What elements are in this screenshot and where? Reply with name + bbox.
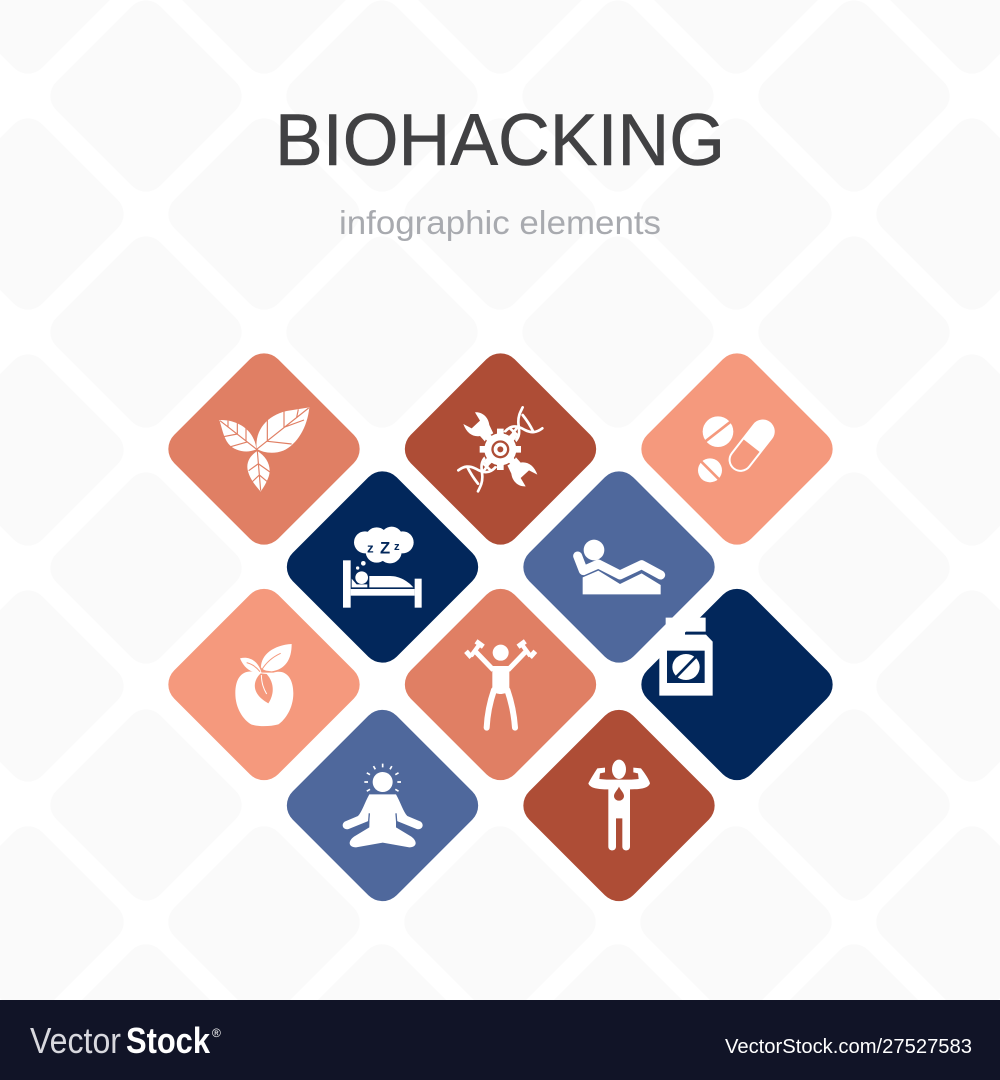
- panel: biotech DNA and wrench: [397, 345, 604, 553]
- icon: man flexing muscles: [588, 760, 650, 850]
- title: BIOHACKING: [275, 100, 725, 181]
- footer bar: [0, 1000, 1000, 1080]
- icon: three leaves: [219, 407, 309, 492]
- subtitle: infographic elements: [339, 204, 661, 241]
- footer logo: [30, 1020, 221, 1061]
- footer logo: Stock: [126, 1020, 211, 1061]
- icon: gear with wrenches and DNA: [458, 407, 542, 491]
- icon: person sleeping in bed: [343, 527, 422, 608]
- panel: natural fruit: [160, 581, 368, 788]
- panel: reclining person: [515, 463, 723, 671]
- panel: sleep: [279, 463, 486, 671]
- icon: tablets and capsule: [698, 415, 780, 482]
- icon: meditating person: [343, 764, 423, 847]
- panel: supplement bottle: [633, 581, 841, 788]
- icon: person sleeping in bed: z: [367, 541, 374, 556]
- footer image id: VectorStock.com/27527583: [725, 1036, 972, 1058]
- icon: apple with leaves: [235, 644, 293, 726]
- icon: person sleeping in bed: z: [394, 541, 400, 553]
- footer logo: Vector: [30, 1020, 121, 1061]
- panel: pills: [633, 345, 841, 553]
- panel: herbal leaves: [160, 345, 368, 553]
- footer logo: ®: [212, 1026, 221, 1040]
- icon: man lifting dumbbells: [466, 641, 535, 728]
- icon: person sleeping in bed: Z: [380, 539, 390, 558]
- icon: pill bottle: [659, 618, 713, 696]
- panel: exercise: [397, 581, 604, 788]
- panel: meditation: [279, 702, 486, 909]
- panel: strength: [515, 702, 723, 909]
- icon: person reclining: [578, 540, 661, 594]
